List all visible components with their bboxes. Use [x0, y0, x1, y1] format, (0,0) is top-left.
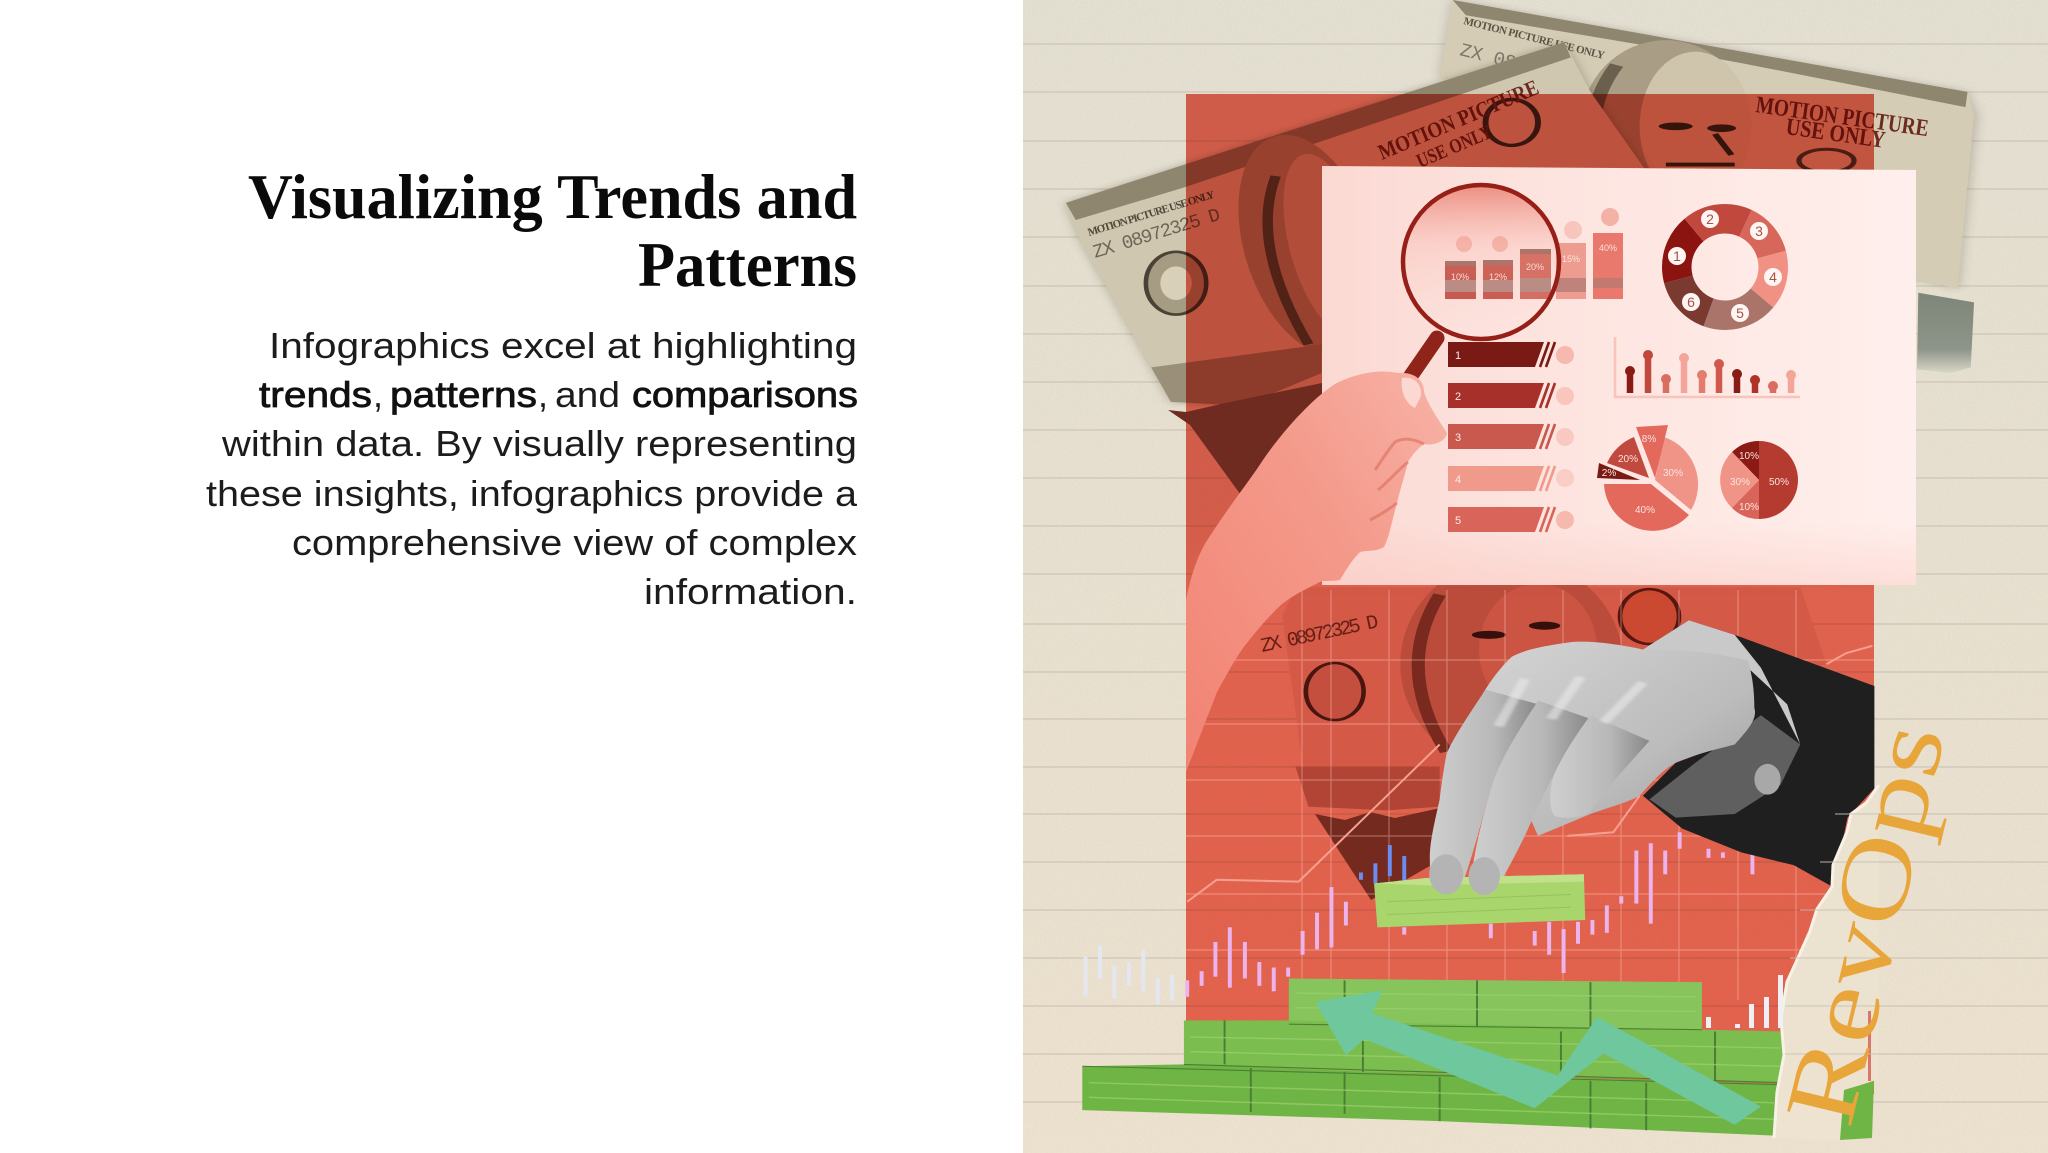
donut chart: [1668, 210, 1782, 322]
title: [248, 161, 857, 300]
bill serial text: [1458, 15, 1930, 154]
cuff: [1649, 715, 1800, 818]
title: Visualizing Trends and: [248, 161, 857, 232]
body text block: patterns: [390, 374, 537, 415]
bar cubes chart: 12%: [1489, 272, 1507, 282]
numbered ribbon bars: 3: [1455, 432, 1461, 444]
bar cubes chart: 15%: [1562, 254, 1580, 264]
magnifying glass: [1403, 185, 1559, 380]
grayscale hand placing block: [1430, 620, 1874, 894]
dollar bill: upper right: [1440, 0, 1977, 373]
pie chart 1: 30%: [1663, 468, 1683, 479]
pie chart 2: 10%: [1739, 502, 1759, 513]
lollipop chart: [1615, 337, 1800, 397]
panel: infographic card: [1322, 166, 1916, 585]
back of hand: [1479, 642, 1755, 836]
bill serial text: MOTION PICTURE USE ONLY: [1462, 15, 1606, 62]
pie chart 1: 8%: [1642, 434, 1656, 445]
body text block: Infographics excel at highlighting: [269, 325, 857, 366]
trend line: [1187, 646, 1872, 902]
numbered ribbon bars: 5: [1455, 515, 1461, 527]
panel: collage photo: [1023, 0, 2048, 1153]
body text block: comprehensive view of complex: [292, 522, 857, 563]
donut chart: 3: [1755, 223, 1763, 239]
donut chart: 6: [1687, 294, 1695, 310]
body text block: information.: [644, 571, 857, 612]
body text block: [206, 325, 858, 612]
dollar bill: lower: [1259, 558, 1827, 810]
dollar bill: upper left: [1066, 42, 1741, 406]
green block held: [1374, 874, 1585, 927]
donut chart: 1: [1673, 248, 1681, 264]
numbered ribbon bars: 2: [1455, 391, 1461, 403]
torn dark bill edge: lower: [1315, 808, 1440, 900]
body text block: within data. By visually representing: [221, 423, 857, 464]
bar cubes chart: 40%: [1599, 243, 1617, 253]
sleeve lining: [1643, 620, 1800, 745]
hand holding magnifier: [1186, 371, 1447, 772]
ruled paper background: [1023, 0, 2048, 1153]
body text block: trends: [259, 374, 372, 415]
numbered ribbon bars: 1: [1455, 350, 1461, 362]
pie chart 2: [1720, 441, 1798, 519]
bill serial text: MOTION PICTURE: [1754, 92, 1930, 142]
numbered ribbon bars: [1448, 342, 1574, 532]
green stacked blocks: [1082, 979, 1787, 1136]
title: Patterns: [638, 229, 857, 300]
body text block: these insights, infographics provide a: [206, 473, 858, 514]
bill serial text: MOTION PICTURE USE ONLY: [1086, 189, 1216, 239]
bill serial text: [1086, 74, 1542, 264]
candlestick chart: [1084, 832, 1754, 1004]
torn paper strip: [1706, 785, 1880, 1141]
pie chart 2: 50%: [1769, 477, 1789, 488]
jacket sleeve: [1643, 620, 1874, 887]
bill serial text: MOTION PICTURE: [1374, 74, 1542, 165]
bill serial text: ZX 08972: [1458, 39, 1551, 83]
donut chart: 5: [1736, 305, 1744, 321]
bar cubes chart: 10%: [1451, 272, 1469, 282]
bar cubes chart: [1445, 208, 1623, 299]
donut chart: 2: [1706, 211, 1714, 227]
fingers: [1430, 690, 1649, 894]
cuff button: [1754, 764, 1781, 795]
pie chart 1: [1597, 425, 1698, 531]
bill serial text: USE ONLY: [1413, 121, 1496, 173]
pie chart 2: 30%: [1730, 477, 1750, 488]
body text block: ,: [538, 374, 548, 415]
card sheet: [1322, 166, 1916, 585]
bill serial text: ZX 08972325 D: [1259, 611, 1381, 659]
body text block: comparisons: [632, 374, 858, 415]
torn dark bill edge: upper: [1168, 383, 1322, 498]
chart grid lines: [1186, 590, 1874, 1000]
bill serial text: USE ONLY: [1784, 114, 1887, 154]
teal arrow: [1315, 990, 1761, 1125]
RevOps label: RevOps: [1763, 712, 1967, 1135]
donut chart: 4: [1769, 269, 1777, 285]
fingertips over block: [1429, 854, 1500, 895]
bill serial text: ZX 08972325 D: [1090, 204, 1223, 264]
pie chart 1: 40%: [1635, 505, 1655, 516]
pie chart 1: 20%: [1618, 454, 1638, 465]
red rectangle overlay: [1186, 94, 1874, 1094]
pie chart 1: 2%: [1602, 468, 1616, 479]
body text block: ,: [373, 374, 383, 415]
bar cubes chart: 20%: [1526, 262, 1544, 272]
finger highlights: [1499, 677, 1643, 726]
body text block: and: [555, 374, 620, 415]
pie chart 2: 10%: [1739, 451, 1759, 462]
numbered ribbon bars: 4: [1455, 474, 1461, 486]
